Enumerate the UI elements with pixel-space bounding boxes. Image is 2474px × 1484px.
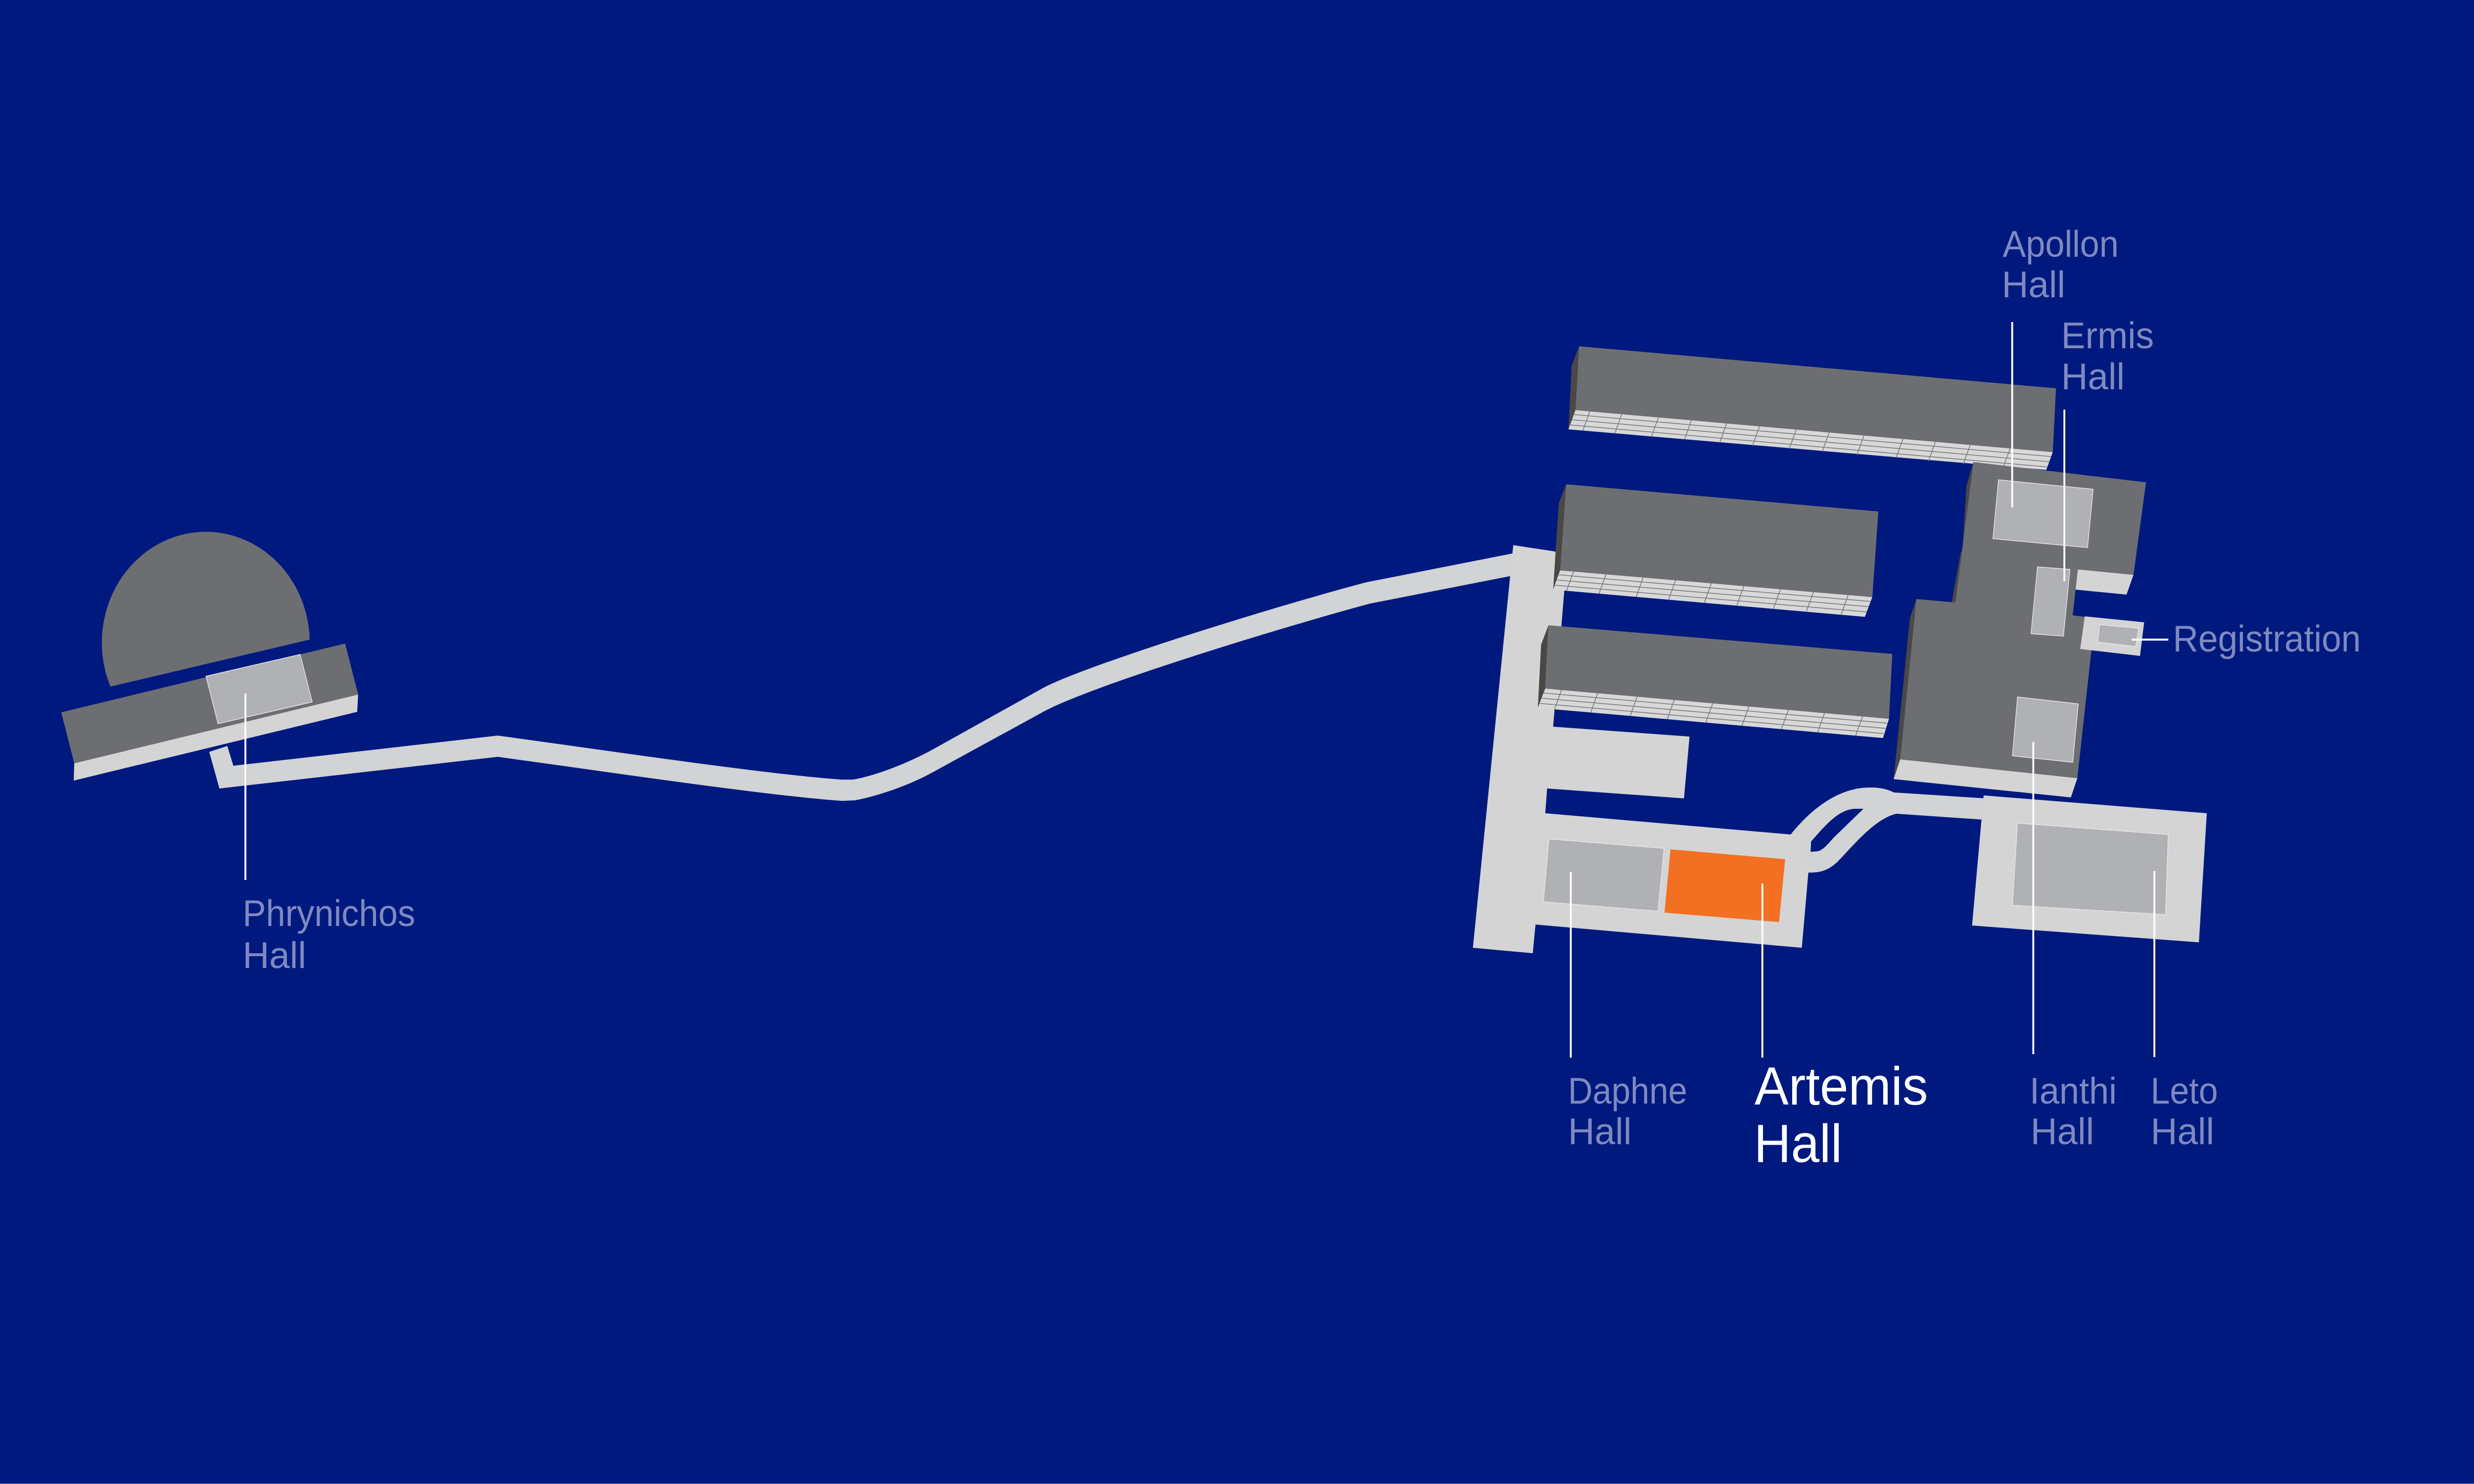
building: Phrynichos complex bbox=[61, 532, 358, 781]
leader lines bbox=[245, 322, 2168, 1058]
Ianthi Hall bbox=[2012, 697, 2078, 762]
Ermis Hall bbox=[2031, 567, 2070, 636]
panel: Daphne Hall bbox=[1543, 839, 1664, 911]
label: Daphne Hall bbox=[1568, 1070, 1687, 1153]
connecting road bbox=[209, 553, 1517, 801]
label: Ianthi Hall: Ianthi bbox=[2030, 1070, 2117, 1112]
building: lower wing bbox=[1538, 625, 1892, 738]
Apollon Hall bbox=[1993, 480, 2093, 548]
label: Apollon Hall: Hall bbox=[2002, 264, 2065, 306]
label: Apollon Hall: Apollon bbox=[2002, 224, 2119, 265]
panel: Artemis Hall bbox=[1665, 849, 1785, 922]
label: Ermis Hall: Hall bbox=[2061, 356, 2125, 398]
semicircular theatre bbox=[102, 532, 310, 687]
building: main complex bbox=[1894, 462, 2146, 797]
label: Ermis Hall: Ermis bbox=[2061, 315, 2154, 357]
curved connector bbox=[1791, 788, 1986, 873]
Registration booth bbox=[2080, 616, 2144, 656]
label: Apollon Hall bbox=[2002, 224, 2119, 306]
Leto Hall bbox=[2012, 823, 2168, 915]
label: Leto Hall bbox=[2151, 1070, 2218, 1153]
label: Phrynichos Hall bbox=[242, 893, 415, 976]
label: Artemis Hall: Artemis bbox=[1755, 1056, 1928, 1116]
building: middle wing bbox=[1553, 484, 1878, 617]
walkway: main spine and plaza bbox=[1473, 545, 1811, 953]
building: top wing bbox=[1569, 346, 2056, 471]
label: Leto Hall: Leto bbox=[2151, 1070, 2218, 1112]
label: Ermis Hall bbox=[2061, 315, 2154, 398]
label: Ianthi Hall bbox=[2030, 1070, 2117, 1153]
label: Artemis Hall: Hall bbox=[1754, 1113, 1842, 1174]
label: Daphne Hall: Daphne bbox=[1568, 1070, 1687, 1112]
label: Phrynichos Hall: Phrynichos bbox=[242, 893, 415, 934]
label: Leto Hall: Hall bbox=[2151, 1111, 2214, 1153]
label: Daphne Hall: Hall bbox=[1568, 1111, 1631, 1153]
panel: Leto block bbox=[1972, 795, 2207, 942]
label: Ianthi Hall: Hall bbox=[2031, 1111, 2094, 1153]
label: Artemis Hall bbox=[1754, 1056, 1928, 1174]
label: Registration: Registration bbox=[2173, 618, 2361, 660]
label: Phrynichos Hall: Hall bbox=[242, 935, 306, 976]
Phrynichos Hall bbox=[206, 654, 312, 724]
